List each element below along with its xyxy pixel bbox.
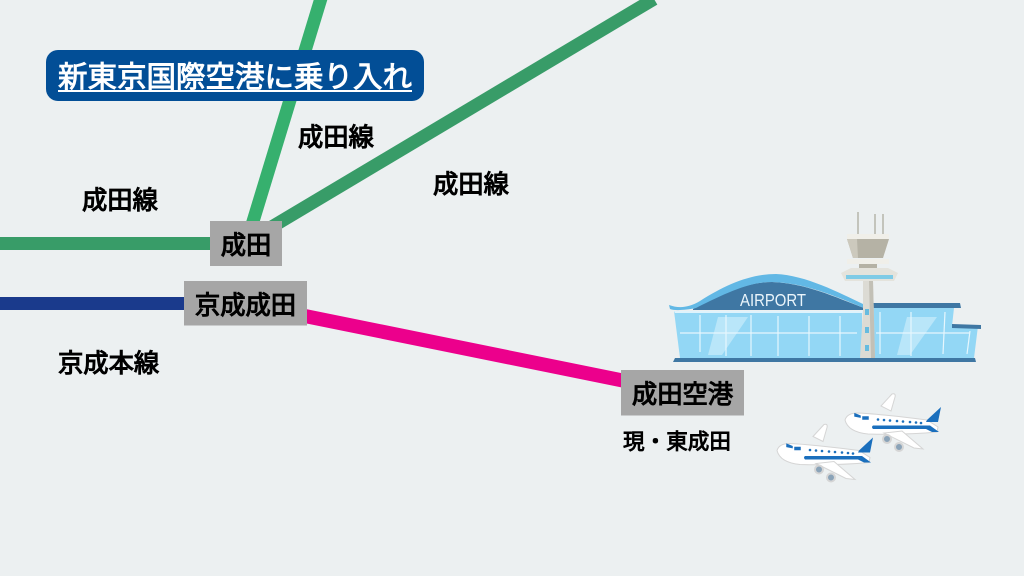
icon: airplane lower	[777, 424, 873, 482]
terminal glass right	[873, 308, 978, 358]
station: Narita	[210, 221, 282, 266]
station: Narita: 成田	[221, 232, 271, 260]
station: Keisei Narita	[184, 281, 307, 326]
terminal glass left	[674, 311, 862, 358]
title badge	[46, 50, 424, 101]
note: currently Higashi-Narita: 現・東成田	[623, 429, 731, 454]
fuselage	[845, 413, 938, 434]
engines	[815, 466, 823, 474]
curved roof	[669, 274, 864, 310]
right roofs	[873, 303, 961, 308]
line: Narita Line west	[0, 237, 215, 250]
station: Narita Airport	[621, 370, 744, 416]
AIRPORT sign: AIRPORT	[740, 290, 806, 310]
engines	[883, 435, 891, 443]
cockpit and windows	[855, 414, 868, 419]
line: Narita Line north-east branch	[270, 0, 654, 228]
title badge: 新東京国際空港に乗り入れ	[58, 61, 412, 94]
antennas	[858, 212, 883, 234]
tower cab	[847, 239, 889, 258]
line: Keisei Narita to Narita Airport	[300, 315, 630, 382]
icon: airport terminal and control tower	[669, 212, 981, 362]
tail	[926, 407, 941, 422]
cockpit and windows	[787, 444, 800, 450]
line: Keisei Main Line	[0, 297, 190, 310]
tower shaft	[860, 280, 875, 358]
label: Narita Line north branch: 成田線	[298, 124, 374, 152]
icon: airplane upper	[845, 394, 941, 451]
label: Narita Line west: 成田線	[82, 187, 158, 215]
roof panel	[693, 282, 864, 310]
line: Narita Line north branch	[251, 0, 322, 228]
label: Narita Line north-east branch: 成田線	[433, 171, 509, 199]
tail	[858, 438, 873, 452]
upper wing	[881, 394, 895, 411]
wing	[816, 462, 855, 480]
upper wing	[813, 424, 827, 442]
fuselage	[777, 444, 870, 465]
label: Keisei Main Line: 京成本線	[58, 350, 159, 378]
station: Narita Airport: 成田空港	[632, 381, 733, 409]
base slab	[673, 358, 976, 362]
wing	[884, 431, 923, 449]
station: Keisei Narita: 京成成田	[195, 292, 296, 320]
observation deck	[841, 268, 898, 281]
